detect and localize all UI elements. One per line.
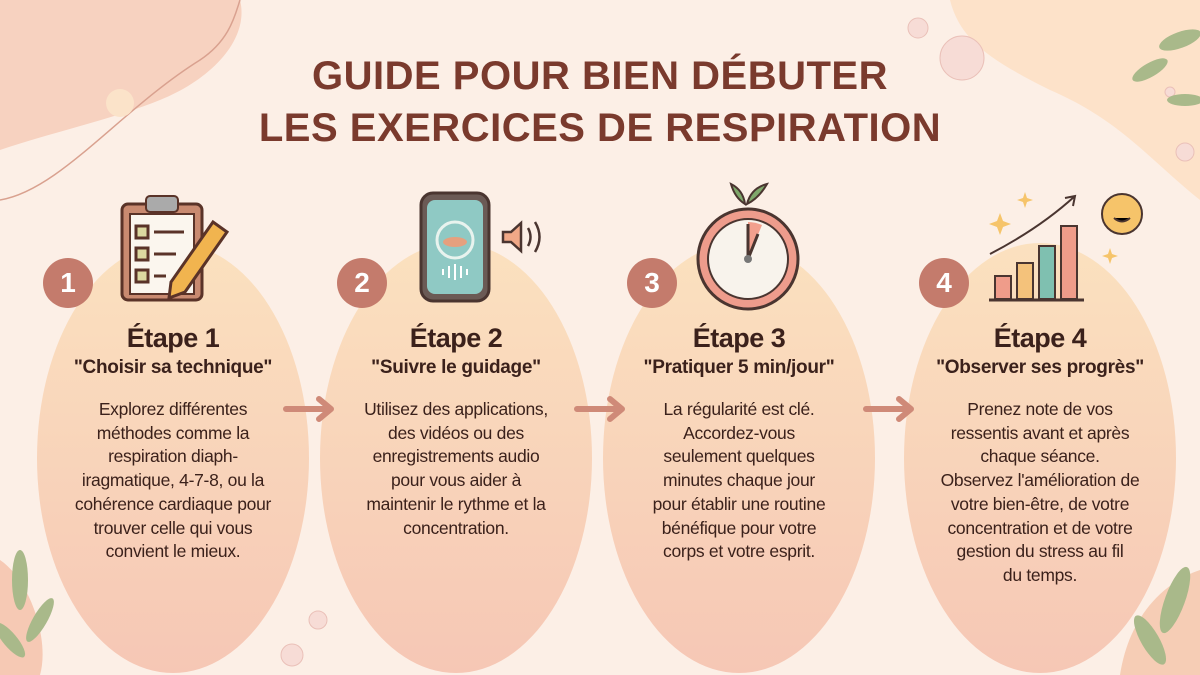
badge 4: 4: [936, 267, 952, 298]
step 4 text: Prenez note de vos: [967, 399, 1113, 419]
step 3 text: "Pratiquer 5 min/jour": [644, 357, 834, 378]
step 4 text: "Observer ses progrès": [936, 357, 1144, 378]
step 2 text: maintenir le rythme et la: [366, 494, 546, 514]
step 4 text: gestion du stress au fil: [957, 541, 1123, 561]
step 3 text: La régularité est clé.: [664, 399, 814, 419]
icon: clock: [696, 182, 800, 310]
arrow 2: [574, 396, 625, 422]
step 1 text: respiration diaph-: [108, 446, 238, 466]
arrow 1: [283, 396, 334, 422]
step 3 text: minutes chaque jour: [663, 470, 815, 490]
badge 1: 1: [60, 267, 76, 298]
step 1 text: "Choisir sa technique": [74, 357, 272, 378]
step 4 text: du temps.: [1003, 565, 1077, 585]
step 2 text: des vidéos ou des: [388, 423, 524, 443]
step 2 text: "Suivre le guidage": [371, 357, 541, 378]
step 1 text: convient le mieux.: [106, 541, 240, 561]
step 1 text: cohérence cardiaque pour: [75, 494, 271, 514]
badge 3: [627, 258, 677, 308]
step 2 text: [364, 323, 548, 538]
icon: phone: [420, 192, 541, 302]
step 3 text: seulement quelques: [663, 446, 815, 466]
badge 3: 3: [644, 267, 660, 298]
step 2 text: enregistrements audio: [373, 446, 539, 466]
step 3 text: Étape 3: [693, 323, 785, 353]
step 1 text: iragmatique, 4-7-8, ou la: [82, 470, 264, 490]
step 1 text: Étape 1: [127, 323, 219, 353]
step 3 text: bénéfique pour votre: [662, 518, 816, 538]
oval 2: [320, 243, 592, 673]
step 4 text: ressentis avant et après: [951, 423, 1129, 443]
icon: growth chart: [989, 192, 1143, 302]
title: LES EXERCICES DE RESPIRATION: [259, 106, 941, 150]
title: GUIDE POUR BIEN DÉBUTER: [312, 54, 888, 98]
badge 1: [43, 258, 93, 308]
step 4 text: concentration et de votre: [947, 518, 1133, 538]
step 3 text: pour établir une routine: [653, 494, 825, 514]
step 4 text: chaque séance.: [980, 446, 1100, 466]
oval 1: [37, 243, 309, 673]
badge 2: 2: [354, 267, 370, 298]
step 1 text: méthodes comme la: [97, 423, 249, 443]
oval 4: [904, 243, 1176, 673]
step 1 text: [74, 323, 272, 561]
step 3 text: corps et votre esprit.: [663, 541, 815, 561]
arrow 3: [863, 396, 914, 422]
badge 4: [919, 258, 969, 308]
step 2 text: pour vous aider à: [391, 470, 521, 490]
step 2 text: Utilisez des applications,: [364, 399, 548, 419]
step 4 text: [936, 323, 1144, 585]
badge 2: [337, 258, 387, 308]
step 2 text: concentration.: [403, 518, 509, 538]
step 4 text: votre bien-être, de votre: [951, 494, 1129, 514]
step 3 text: Accordez-vous: [683, 423, 795, 443]
title: [259, 54, 941, 150]
step 3 text: [644, 323, 834, 561]
step 1 text: trouver celle qui vous: [94, 518, 252, 538]
icon: clipboard: [120, 195, 229, 302]
oval 3: [603, 243, 875, 673]
step 4 text: Étape 4: [994, 323, 1086, 353]
step 1 text: Explorez différentes: [99, 399, 247, 419]
step 4 text: Observez l'amélioration de: [941, 470, 1139, 490]
step 2 text: Étape 2: [410, 323, 502, 353]
